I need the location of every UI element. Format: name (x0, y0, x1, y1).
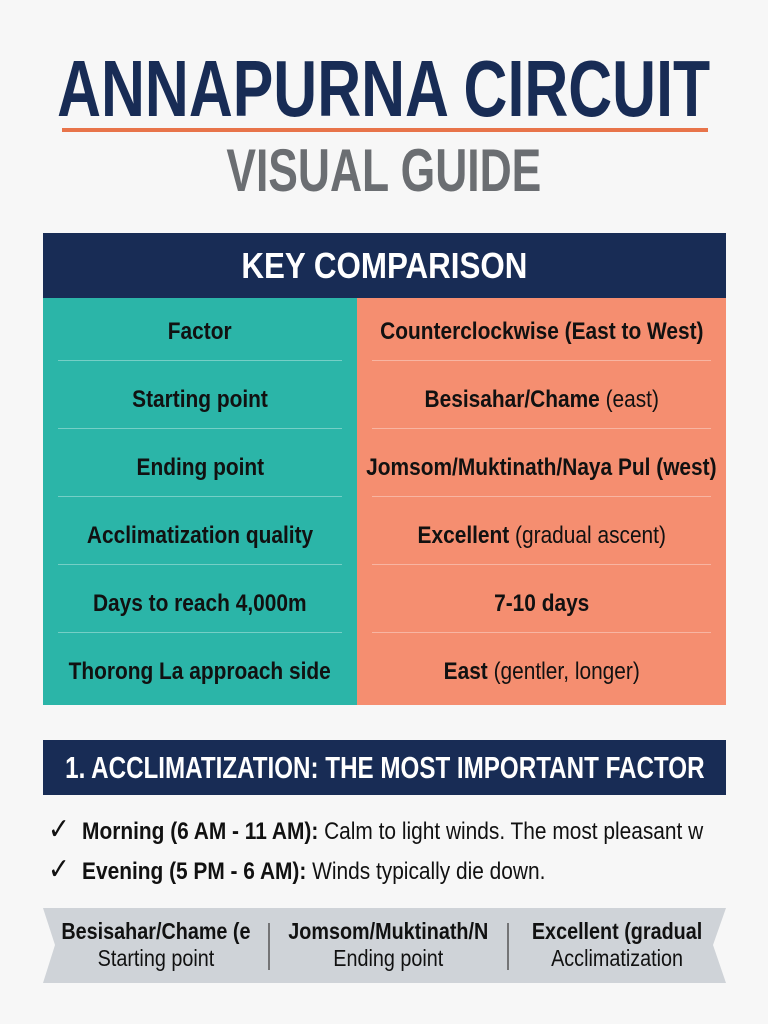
ribbon item 1: Starting point (98, 945, 214, 971)
ribbon summary (43, 908, 726, 983)
bullet list (48, 813, 704, 886)
section heading: 1. ACCLIMATIZATION: THE MOST IMPORTANT FACTOR (65, 750, 704, 784)
left column: Starting point (132, 386, 268, 413)
right column: East (gentler, longer) (443, 658, 640, 685)
right column: Counterclockwise (East to West) (380, 318, 703, 345)
bullet: evening: ✓ Evening (5 PM - 6 AM): Winds typically die down. (48, 853, 545, 886)
ribbon item 3: Acclimatization (551, 945, 683, 971)
right column: Excellent (gradual ascent) (417, 522, 666, 549)
left column: Acclimatization quality (87, 522, 313, 549)
bullet: morning: ✓ Morning (6 AM - 11 AM): Calm to light winds. The most pleasant w (48, 813, 703, 846)
section heading (43, 740, 726, 795)
table heading (43, 233, 726, 298)
right column: Besisahar/Chame (east) (424, 386, 659, 413)
left column (43, 298, 357, 705)
left column: Thorong La approach side (69, 658, 331, 685)
left column: Ending point (136, 454, 264, 481)
orange underline (62, 128, 708, 132)
ribbon item 2: Jomsom/Muktinath/N (288, 918, 489, 944)
right column (357, 298, 726, 705)
title: ANNAPURNA CIRCUIT (57, 44, 711, 133)
right column: Jomsom/Muktinath/Naya Pul (west) (366, 454, 717, 481)
ribbon item 3 (532, 918, 702, 971)
ribbon item 1: Besisahar/Chame (e (61, 918, 251, 944)
table heading: KEY COMPARISON (242, 244, 527, 286)
ribbon item 3: Excellent (gradual (532, 918, 702, 944)
ribbon item 2 (288, 918, 489, 971)
right column: 7-10 days (494, 590, 589, 617)
left column: Factor (168, 318, 232, 345)
panel: key comparison table (43, 233, 726, 705)
ribbon item 2: Ending point (333, 945, 443, 971)
ribbon item 1 (61, 918, 251, 971)
subtitle: VISUAL GUIDE (227, 137, 541, 204)
left column: Days to reach 4,000m (93, 590, 307, 617)
